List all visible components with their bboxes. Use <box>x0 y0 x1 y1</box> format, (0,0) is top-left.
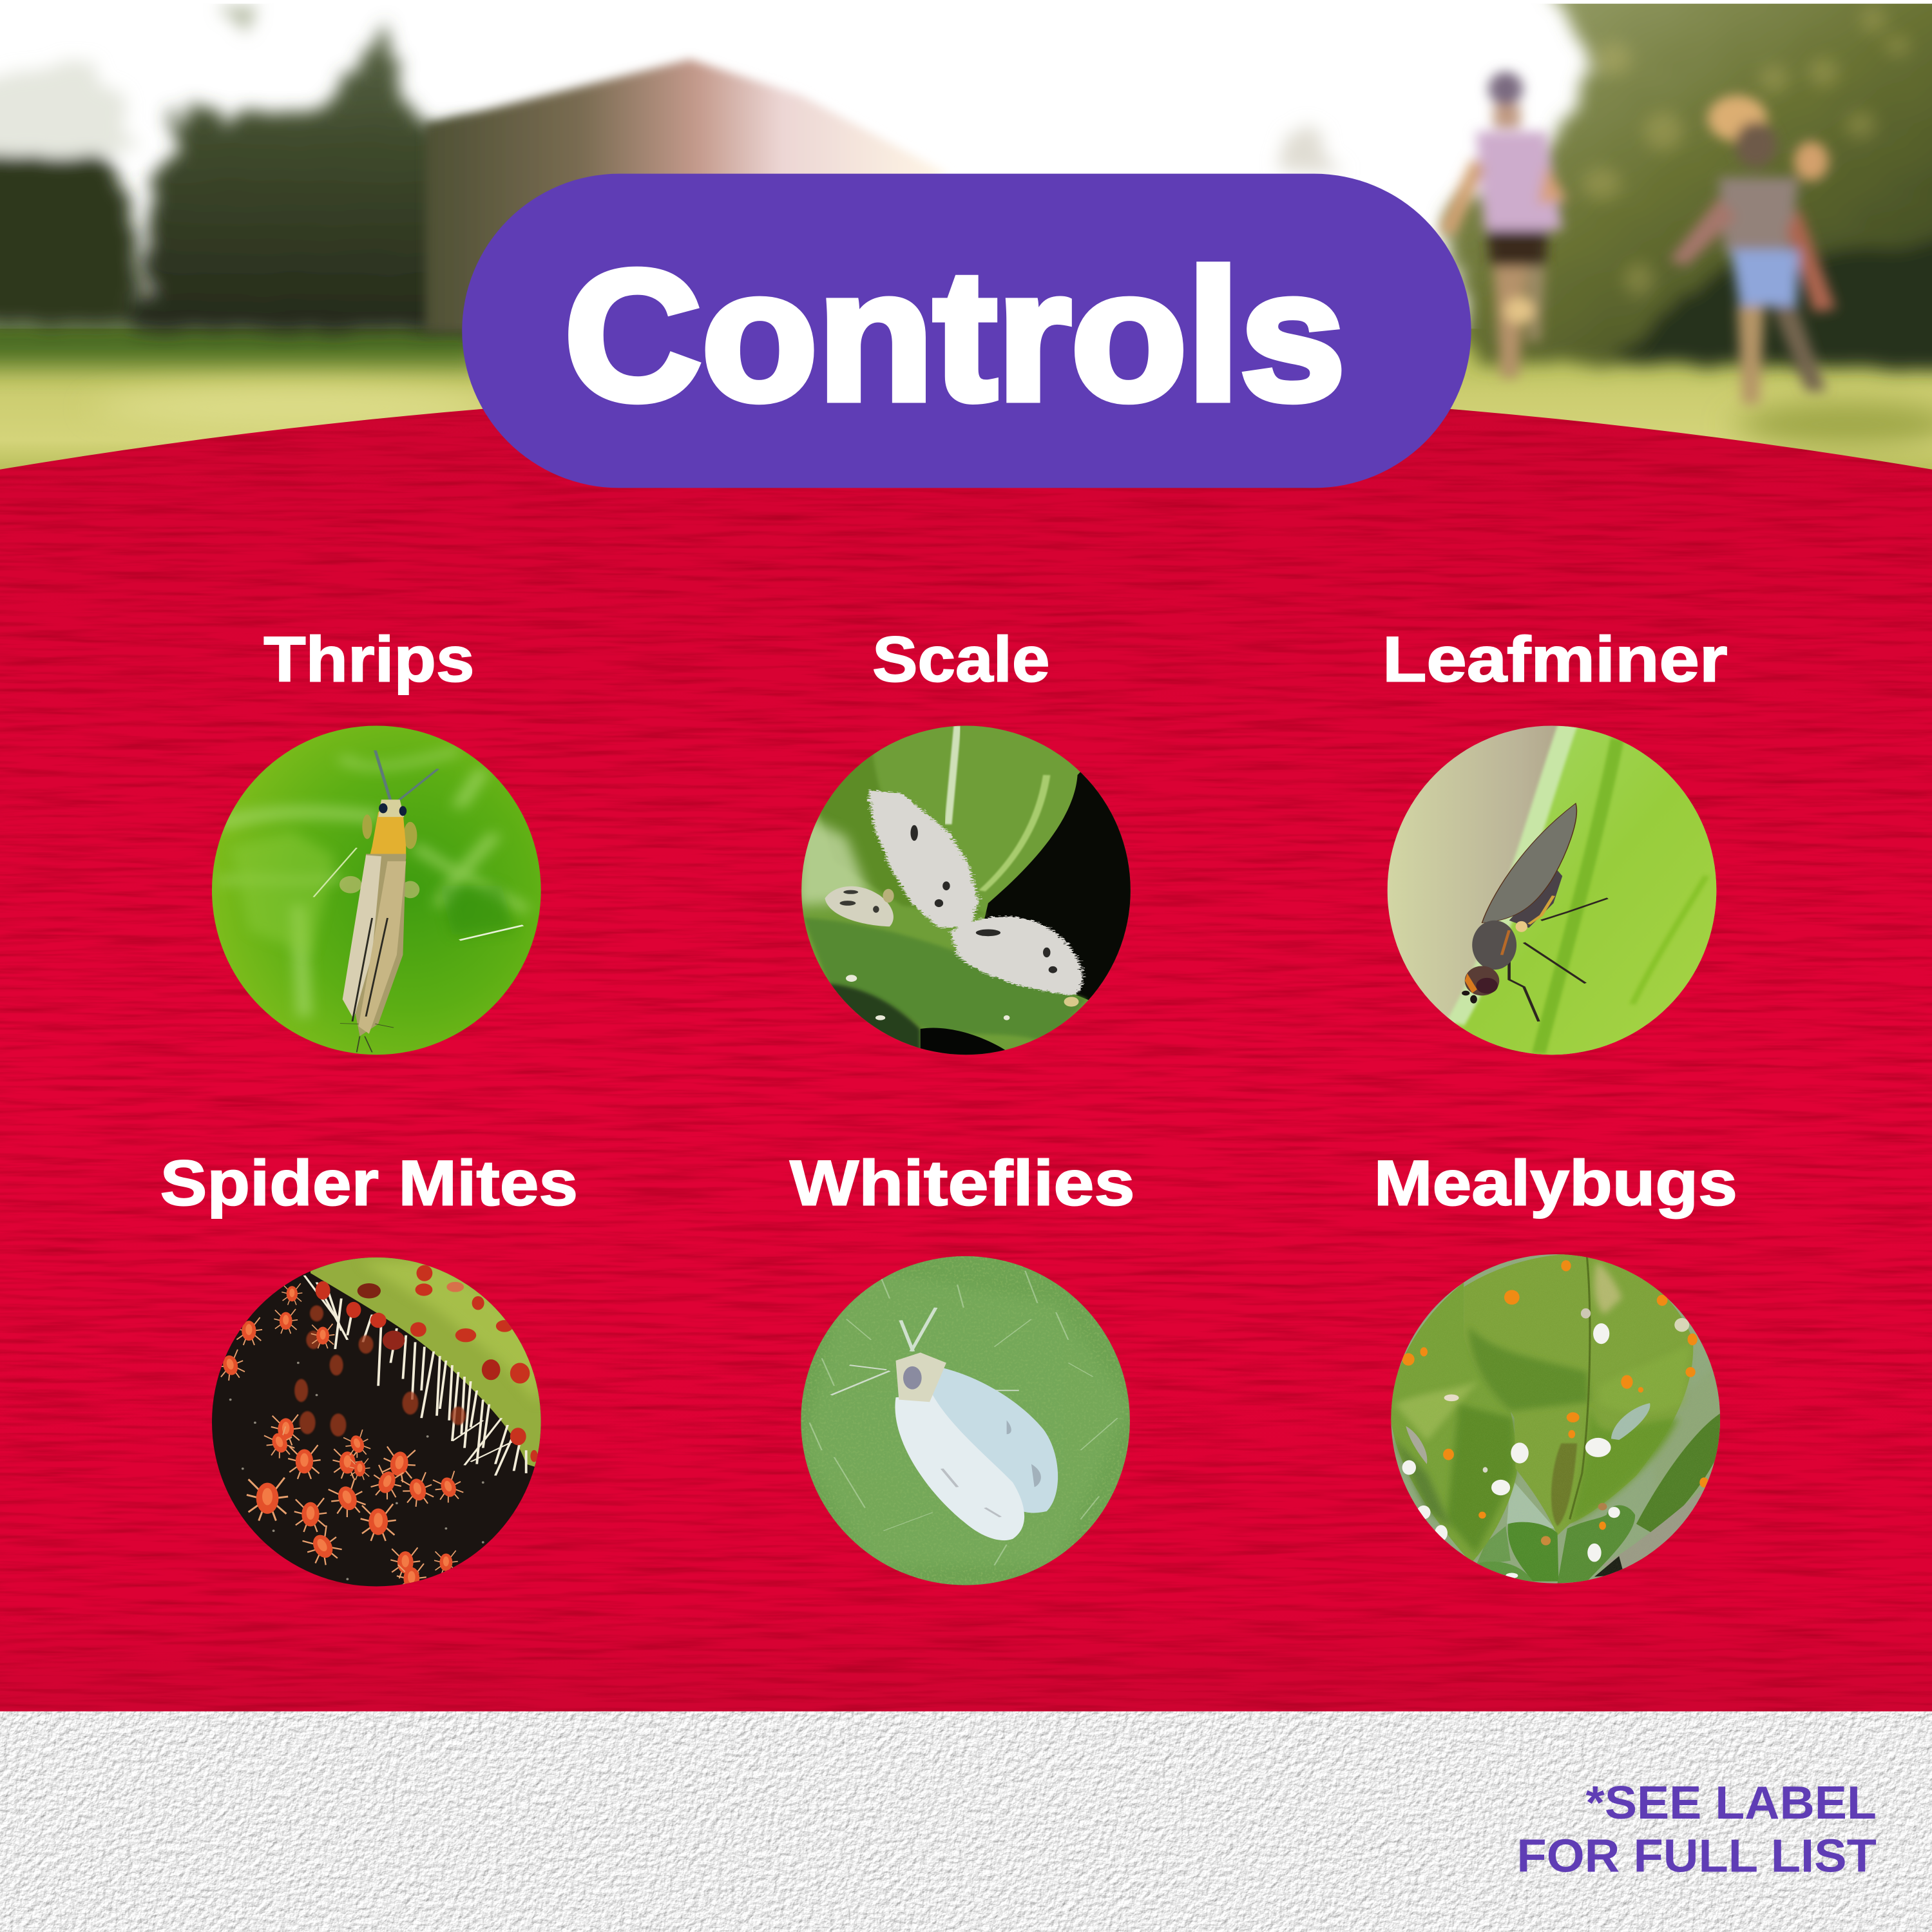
fly <box>1462 803 1608 1022</box>
child running right <box>1670 95 1836 405</box>
grey stucco footer panel <box>0 1712 1932 1932</box>
purple title pill <box>462 174 1471 488</box>
heading: Scale: Scale <box>872 624 1050 696</box>
heading: Whiteflies: Whiteflies <box>790 1148 1135 1219</box>
bokeh highlights <box>1582 6 1910 296</box>
scale insects <box>868 790 1082 995</box>
mites <box>214 1283 466 1594</box>
whitefly <box>831 1308 1058 1540</box>
title: Controls <box>564 232 1346 439</box>
heading: Thrips: Thrips <box>263 624 474 696</box>
photo circle: scale insects <box>797 726 1142 1058</box>
red wood panel <box>0 370 1932 1712</box>
photo circle: thrips <box>212 726 542 1056</box>
footnote: FOR FULL LIST <box>1516 1830 1877 1882</box>
photo circle: whitefly <box>801 1256 1131 1586</box>
photo circle: leafminer fly <box>1388 718 1736 1058</box>
child running left <box>1439 72 1567 378</box>
insect <box>314 751 523 1052</box>
footnote: *SEE LABEL <box>1586 1777 1877 1829</box>
photo circle: mealybugs <box>1390 1252 1723 1586</box>
heading: Leafminer: Leafminer <box>1382 624 1728 696</box>
heading: Spider Mites: Spider Mites <box>160 1148 578 1219</box>
footnote <box>1516 1777 1877 1882</box>
photo circle: spider mites <box>212 1255 563 1594</box>
heading: Mealybugs: Mealybugs <box>1374 1148 1737 1219</box>
background photo: garden with running children <box>0 0 1932 493</box>
